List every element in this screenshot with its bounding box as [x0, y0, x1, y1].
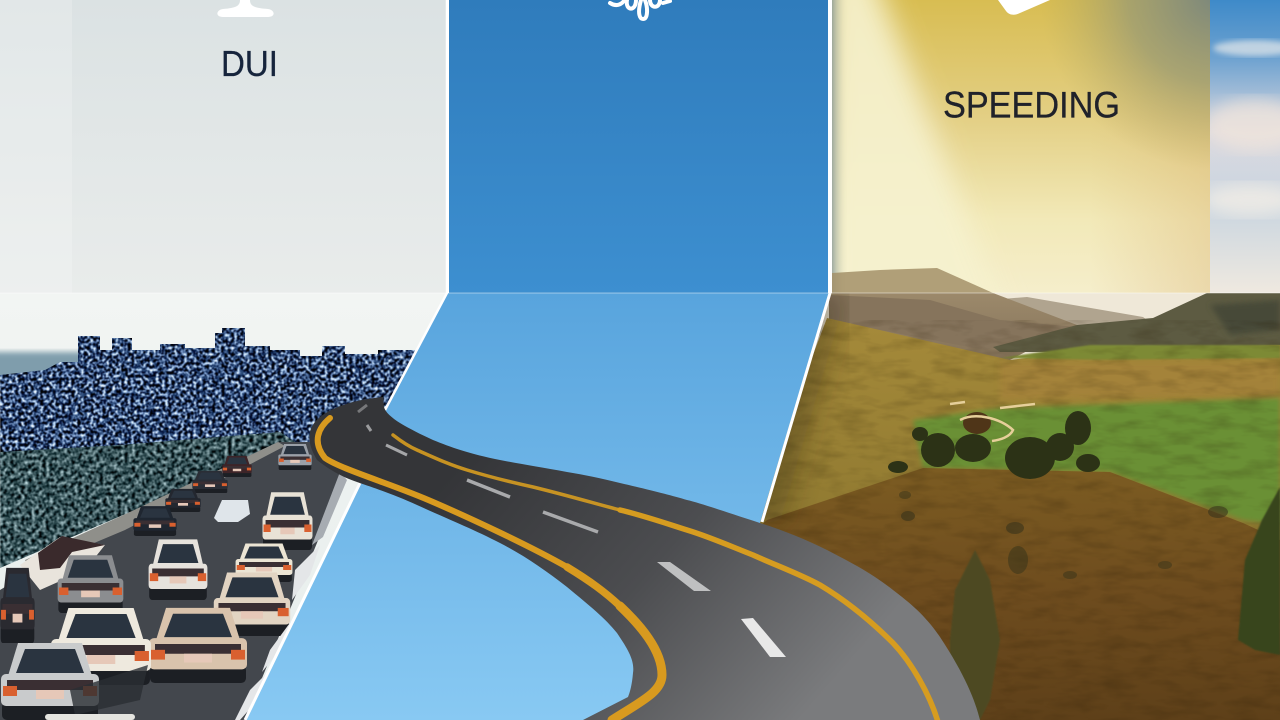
highway: [0, 442, 358, 720]
cars: [0, 444, 320, 720]
panel: countryside landscape: [750, 273, 1280, 720]
road surface: [309, 397, 980, 720]
right yellow line: [393, 435, 938, 720]
panel: blue lower section: [245, 293, 829, 720]
forest: [0, 430, 302, 570]
road illustration: [309, 397, 980, 720]
panel: sky strip: [1200, 0, 1280, 293]
trees: [888, 411, 1100, 479]
mountains: [1008, 297, 1146, 325]
panel: blue header: [449, 0, 828, 293]
panel: speeding header: [832, 0, 1210, 293]
panel: DUI header: [0, 0, 447, 294]
dotted text line 2: [527, 104, 740, 108]
lane dashes: [358, 405, 786, 657]
icon: white tag: [998, 0, 1050, 15]
dotted text line: [952, 48, 1100, 54]
heading: SPEEDING: SPEEDING: [943, 84, 1120, 126]
panel: city traffic photo: [0, 293, 447, 720]
icon: white squiggle: [610, 0, 670, 19]
dotted text line 1: [567, 56, 714, 62]
skyline: [0, 326, 420, 476]
edge shadow: [762, 293, 829, 522]
dotted text line: [158, 104, 322, 110]
icon: glass base: [217, 0, 274, 17]
left yellow line: [318, 418, 662, 720]
heading: DUI: DUI: [221, 43, 278, 84]
field: [760, 318, 1280, 540]
foreground hill: [750, 468, 1280, 720]
